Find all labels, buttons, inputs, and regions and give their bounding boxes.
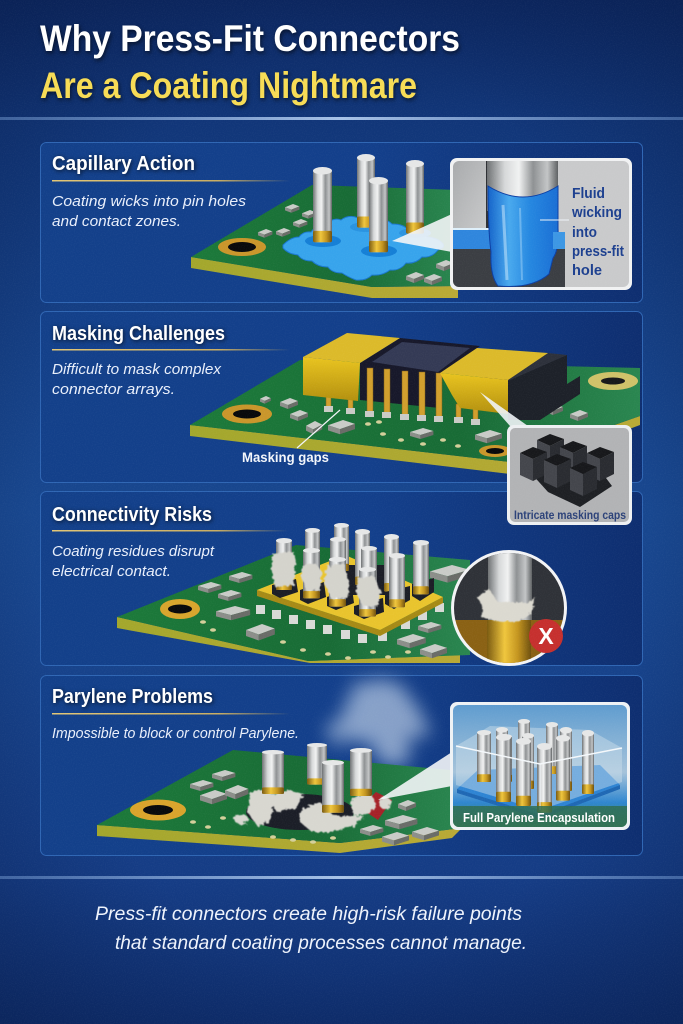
pins [357, 154, 375, 228]
circuit board with masked connector [190, 333, 640, 474]
heading: masking challenges: Masking Challenges [52, 322, 225, 345]
text: masking description [52, 361, 221, 398]
title: Why Press-Fit Connectors [40, 18, 460, 59]
text: capillary description: and contact zones. [52, 213, 181, 230]
inset label: hole [572, 263, 602, 279]
inset label: into [572, 225, 597, 241]
red component [360, 792, 392, 820]
black connector end [508, 355, 580, 420]
circuit board with parylene residue [97, 743, 462, 853]
text: capillary description: Coating wicks into pin holes [52, 193, 247, 210]
inset: masking caps [480, 392, 632, 525]
caps label: Intricate masking caps [514, 510, 626, 522]
text: connectivity description: electrical contact. [52, 563, 171, 580]
residue [271, 551, 381, 606]
panel: parylene problems [40, 676, 642, 856]
circuit board with residue-coated pins [117, 523, 470, 663]
text: parylene description: Impossible to block or control Parylene. [52, 725, 299, 742]
label: masking gaps [242, 410, 340, 465]
heading: parylene problems: Parylene Problems [52, 685, 213, 708]
connector pin field [360, 338, 480, 408]
footer statement [95, 903, 527, 954]
pins [307, 743, 327, 785]
encapsulation label: Full Parylene Encapsulation [463, 811, 615, 825]
footer statement: Press-fit connectors create high-risk failure points [95, 903, 522, 925]
panel: masking challenges [40, 312, 642, 482]
black cap array [520, 434, 614, 507]
callout wedge [392, 214, 452, 252]
footer statement: that standard coating processes cannot manage. [115, 932, 527, 954]
back row pins [330, 565, 400, 595]
dark base and residue [246, 794, 354, 830]
left yellow tape [303, 333, 400, 363]
text: connectivity description: Coating residues disrupt [52, 543, 215, 560]
label: masking gaps: Masking gaps [242, 449, 329, 465]
inset: full parylene encapsulation [450, 702, 630, 830]
parylene vapour cloud [325, 680, 426, 766]
black bases [272, 578, 434, 619]
text: connectivity description [52, 543, 215, 580]
blue coating puddle [283, 216, 444, 280]
inset: fluid wicking into hole [450, 158, 632, 290]
panel: capillary action [40, 142, 642, 302]
inset label [571, 186, 624, 279]
text: masking description: Difficult to mask complex [52, 361, 221, 378]
yellow carrier [257, 590, 443, 636]
text: masking description: connector arrays. [52, 381, 175, 398]
heading: capillary action: Capillary Action [52, 152, 195, 175]
inset: contaminated pin close-up [450, 550, 568, 667]
title: Are a Coating Nightmare [40, 65, 417, 106]
heading: connectivity risks: Connectivity Risks [52, 503, 212, 526]
inset label: Fluid [572, 186, 605, 202]
inset label: press-fit [572, 244, 624, 260]
front pins [276, 538, 292, 590]
red X badge: X [538, 623, 554, 649]
circuit board with pins and blue coating [191, 154, 458, 298]
pads under yellow carrier [256, 603, 444, 643]
title [40, 18, 460, 106]
inset label: wicking [571, 205, 622, 221]
callout wedge [378, 752, 452, 800]
panel: connectivity risks [40, 492, 642, 667]
right yellow tape [440, 348, 548, 380]
gold pins [326, 368, 478, 420]
text: capillary description [52, 193, 247, 230]
